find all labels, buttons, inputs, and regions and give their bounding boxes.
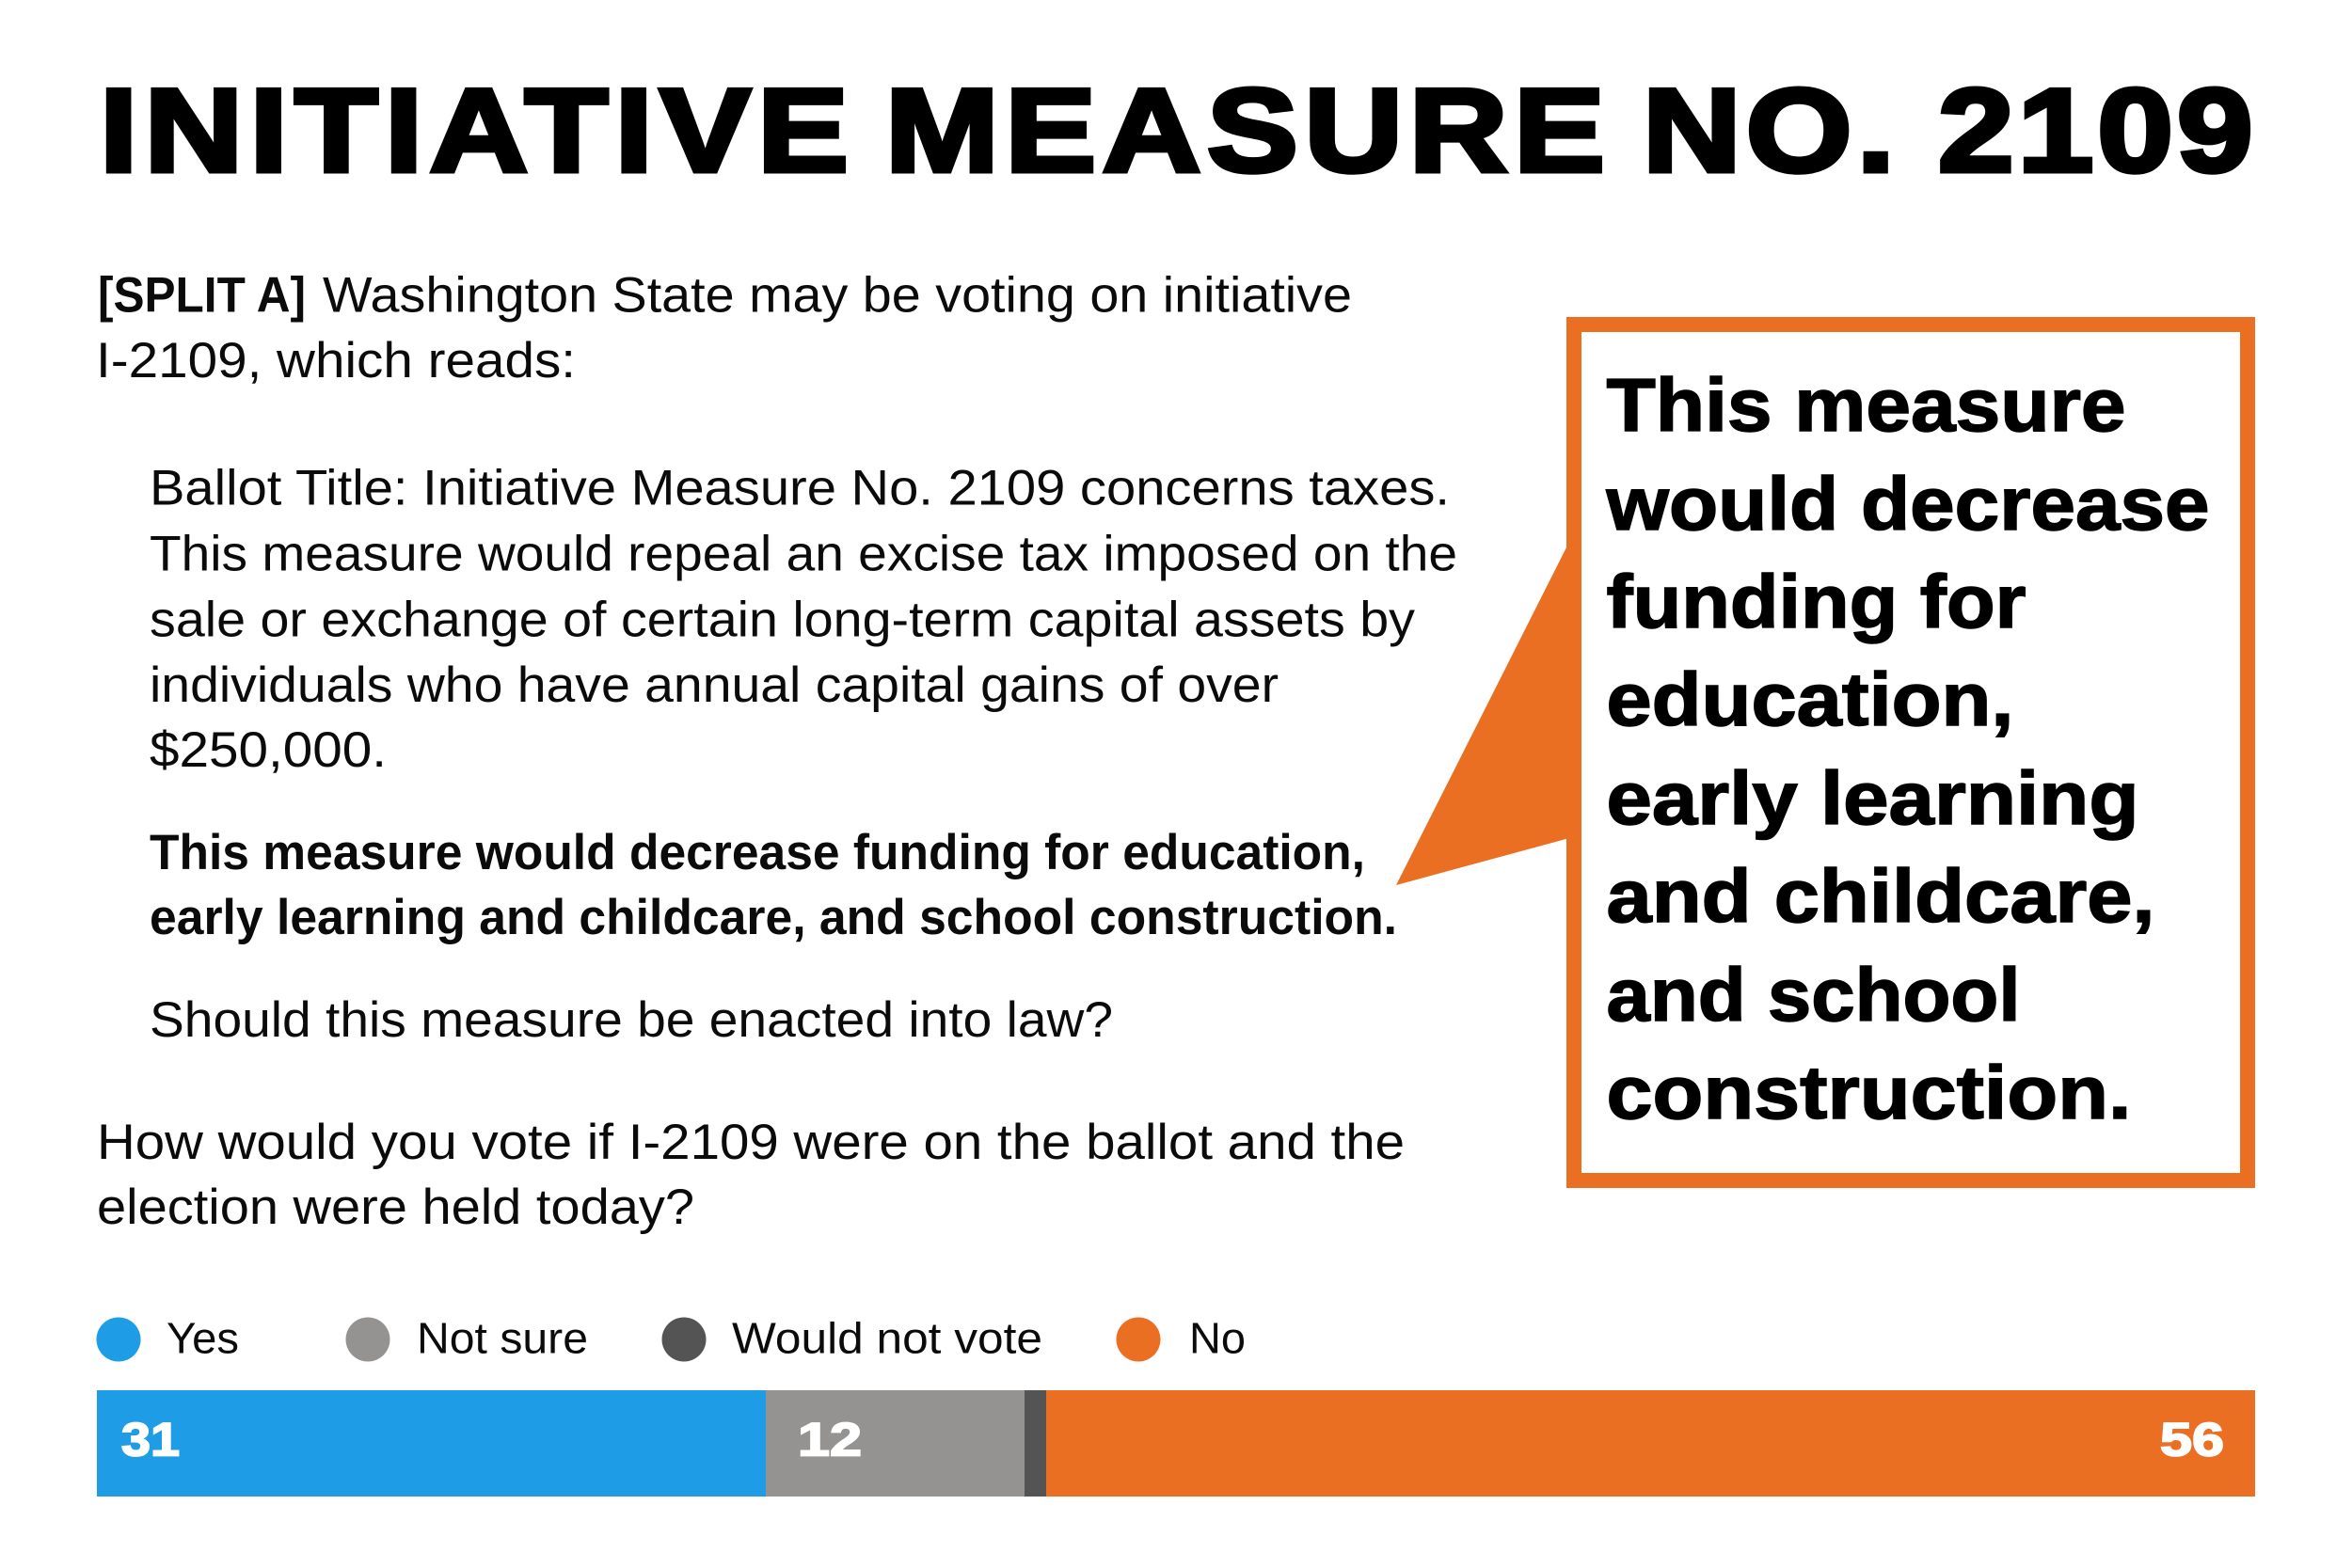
bar segment: not sure 12 [766, 1390, 1025, 1497]
legend item: would not vote: Would not vote [732, 1313, 1042, 1362]
legend item: not sure: Not sure [417, 1313, 588, 1362]
legend [96, 1313, 1246, 1362]
text block: ballot title: This measure would repeal an excise tax imposed on the [150, 527, 1457, 581]
text block: vote question [97, 1115, 1405, 1235]
callout text: education, [1607, 657, 2013, 741]
text block: vote question: election were held today? [97, 1180, 694, 1235]
callout text: would decrease [1605, 462, 2209, 546]
callout pointer [1396, 542, 1569, 885]
text block: enact question: Should this measure be enacted into law? [150, 992, 1113, 1048]
legend item: yes: Yes [167, 1313, 239, 1362]
bar segment: yes 31: 31 [121, 1413, 180, 1465]
bar segment: no 56: 56 [2160, 1413, 2224, 1465]
title: MEASURE [885, 64, 1605, 197]
text block: bold funding statement [150, 825, 1397, 945]
callout text [1605, 363, 2209, 1134]
text block: ballot title: individuals who have annual capital gains of over [150, 657, 1279, 713]
callout box with pointer [1396, 325, 2248, 1180]
callout text: funding for [1607, 560, 2026, 643]
callout text: and school [1607, 953, 2021, 1037]
text block: vote question: How would you vote if I-2109 were on the ballot and the [97, 1115, 1405, 1170]
legend item: no [1116, 1313, 1246, 1362]
text block: ballot title: Ballot Title: Initiative Measure No. 2109 concerns taxes. [150, 461, 1450, 515]
text block: introduction: [SPLIT A] [98, 267, 306, 324]
text block: ballot title: sale or exchange of certain long-term capital assets by [150, 593, 1416, 647]
bar segment: no 56 [1046, 1390, 2255, 1497]
callout text: early learning [1607, 756, 2139, 840]
title: INITIATIVE [100, 64, 849, 197]
callout text: This measure [1607, 363, 2126, 447]
bar segment: not sure 12: 12 [798, 1413, 862, 1465]
callout text: and childcare, [1607, 854, 2154, 938]
text block: introduction: I-2109, which reads: [96, 333, 576, 388]
text block: ballot title: $250,000. [150, 722, 387, 778]
bar segment: would not vote [1025, 1390, 1046, 1497]
text block: introduction [96, 267, 1352, 388]
callout text: construction. [1607, 1051, 2132, 1134]
legend item: yes [96, 1313, 239, 1362]
legend item: no: No [1189, 1313, 1246, 1362]
bar segment: yes 31 [97, 1390, 766, 1497]
legend item: not sure [346, 1313, 588, 1362]
text block: bold funding statement: early learning and childcare, and school construction. [150, 890, 1397, 945]
text block: bold funding statement: This measure would decrease funding for education, [150, 825, 1365, 880]
text block: introduction: Washington State may be voting on initiative [323, 267, 1352, 324]
callout frame [1574, 325, 2248, 1180]
title [100, 64, 2253, 197]
text block: ballot title [150, 461, 1457, 778]
title: 2109 [1938, 64, 2253, 197]
title: NO. [1643, 64, 1895, 197]
stacked bar chart [97, 1390, 2255, 1497]
